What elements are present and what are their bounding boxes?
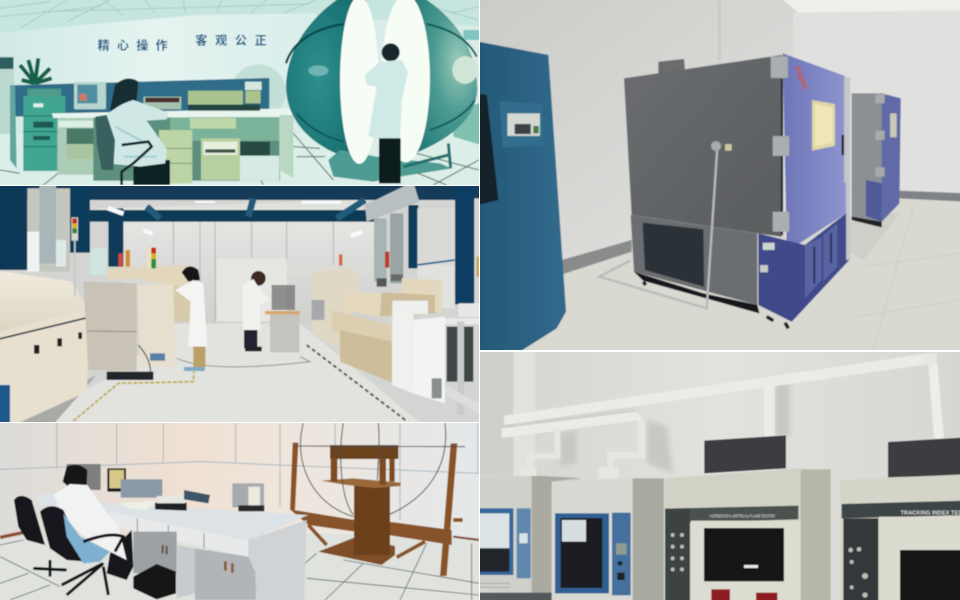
technician one bbox=[175, 266, 207, 371]
tester one bbox=[473, 475, 580, 600]
photo: integrating sphere lab bbox=[0, 0, 487, 193]
antenna loops bbox=[295, 423, 465, 517]
technician two bbox=[243, 271, 270, 351]
ducts bbox=[39, 178, 419, 287]
photo: environmental test chamber bbox=[473, 0, 960, 360]
desk equipment bbox=[67, 464, 264, 511]
drawer unit and power box bbox=[159, 130, 240, 183]
wall slogan: 客观公正 bbox=[195, 33, 267, 48]
side windows bbox=[27, 188, 455, 308]
small glass sphere bbox=[234, 64, 286, 109]
white cabinets right bbox=[392, 301, 482, 415]
floor bbox=[510, 191, 960, 360]
wall shadows bbox=[507, 382, 790, 473]
photo: assembly line workshop bbox=[0, 178, 487, 432]
blue partition bbox=[10, 78, 269, 117]
monitor bbox=[74, 82, 106, 109]
far chamber bbox=[852, 93, 901, 227]
blue cabinet left bbox=[473, 41, 566, 360]
floor bbox=[20, 324, 418, 422]
back wall and doors bbox=[123, 222, 377, 325]
lamps bbox=[107, 201, 363, 238]
standing technician bbox=[365, 43, 408, 183]
seated operator bbox=[95, 79, 170, 185]
large sphere body bbox=[286, 0, 478, 182]
tester three horizontal vertical flame tester: HORIZONTAL VERTICAL FLAME TESTER bbox=[709, 513, 775, 518]
door hinges bbox=[771, 57, 789, 232]
ceiling beams bbox=[0, 178, 487, 305]
photo: flame test instruments bbox=[473, 343, 960, 600]
desk bbox=[52, 108, 293, 181]
cable bbox=[599, 141, 732, 308]
sphere lit hemispheres bbox=[340, 0, 430, 164]
tester two bbox=[519, 467, 664, 600]
walls bbox=[473, 0, 960, 360]
air conditioner and plant bbox=[0, 57, 52, 134]
photo: antenna test room bbox=[0, 413, 487, 600]
floor bbox=[0, 533, 487, 600]
desk bbox=[37, 492, 308, 600]
lower floor strip bbox=[473, 593, 552, 600]
wall panel seams bbox=[0, 423, 479, 520]
main chamber bbox=[624, 53, 850, 328]
signal light towers bbox=[71, 217, 479, 297]
operator and chairs bbox=[14, 465, 133, 595]
beige machines right bbox=[312, 267, 442, 382]
main chamber: espec bbox=[793, 65, 811, 91]
back wall bbox=[0, 14, 316, 82]
floor bbox=[0, 102, 479, 185]
work table bbox=[265, 285, 300, 352]
ceiling bbox=[0, 0, 487, 33]
wall slogan bbox=[98, 33, 267, 52]
instrument rack bbox=[23, 89, 65, 171]
beige machines left bbox=[0, 270, 87, 428]
black hood boxes bbox=[704, 435, 960, 477]
exhaust pipes bbox=[502, 353, 944, 475]
wall slogan: 精心操作 bbox=[98, 37, 168, 52]
tester four tracking index tester bbox=[840, 474, 960, 600]
tester three horizontal vertical flame tester bbox=[665, 468, 831, 600]
antenna wooden stand bbox=[290, 443, 463, 576]
bench instruments bbox=[143, 82, 262, 111]
